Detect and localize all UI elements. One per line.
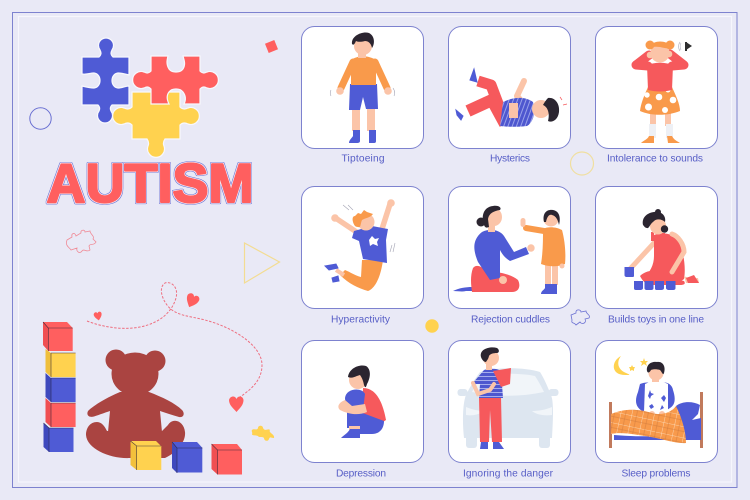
icon: heart small [93,311,103,321]
label: Tiptoeing [342,154,385,164]
figure: boy on tiptoes [330,33,395,143]
red puzzle piece [133,56,218,104]
teddy bear [86,350,185,458]
label: Hysterics [490,154,530,164]
figure: girl rejecting hug [520,210,565,294]
panel: sleep problems [596,340,718,480]
figure: boy reading book [472,347,511,449]
decoration: yellow puzzle [252,426,274,441]
icon: car [458,368,558,448]
figure: boy hugging knees [338,366,386,438]
yellow puzzle piece [113,92,199,157]
label: Sleep problems [622,468,690,480]
decoration: yellow circle outline [570,152,594,175]
red block [46,398,76,427]
figure: child in bed [609,362,703,448]
label: Ignoring the danger [463,468,554,480]
decoration: red diamond [265,40,278,53]
decoration: yellow dot [425,319,439,333]
figure: boy lying on floor [456,69,567,127]
icon: block stack [43,322,76,452]
panel: hyperactivity [302,186,424,326]
dashed heart trail [87,283,262,397]
panel: hysterics [448,26,570,164]
blue block on floor [172,442,202,473]
label: Depression [336,468,386,480]
label: Rejection cuddles [471,314,550,326]
icon: puzzle pieces [82,38,218,157]
red block on floor [212,444,242,474]
title: AUTISM [46,153,254,214]
figure: girl lining up cups [624,209,699,290]
label: Hyperactivity [331,314,391,326]
figure: girl covering ears [636,40,692,143]
icon: moon and stars [614,356,648,375]
blue puzzle piece [82,38,129,123]
decoration: red puzzle outline [66,230,96,252]
panel: rejection cuddles [448,186,570,326]
decoration: purple circle [30,108,51,129]
icon: heart medium [183,292,201,310]
figure: kneeling mother [453,206,535,292]
decoration: blue puzzle outline [571,310,589,325]
panel: intolerance to sounds [596,26,718,164]
label: Intolerance to sounds [607,154,703,164]
panel: builds toys in one line [596,186,718,326]
panel: tiptoeing [302,26,424,164]
cups [624,267,676,290]
yellow block [46,349,76,377]
figure: jumping boy [325,199,395,291]
blue block [44,423,74,452]
panel: ignoring the danger [448,340,570,480]
decoration: yellow triangle [244,243,280,283]
yellow block on floor [130,441,161,470]
panel: depression [302,340,424,480]
label: Builds toys in one line [608,314,704,326]
red block [43,322,73,351]
blue block [46,373,76,402]
icon: heart large [229,396,244,412]
